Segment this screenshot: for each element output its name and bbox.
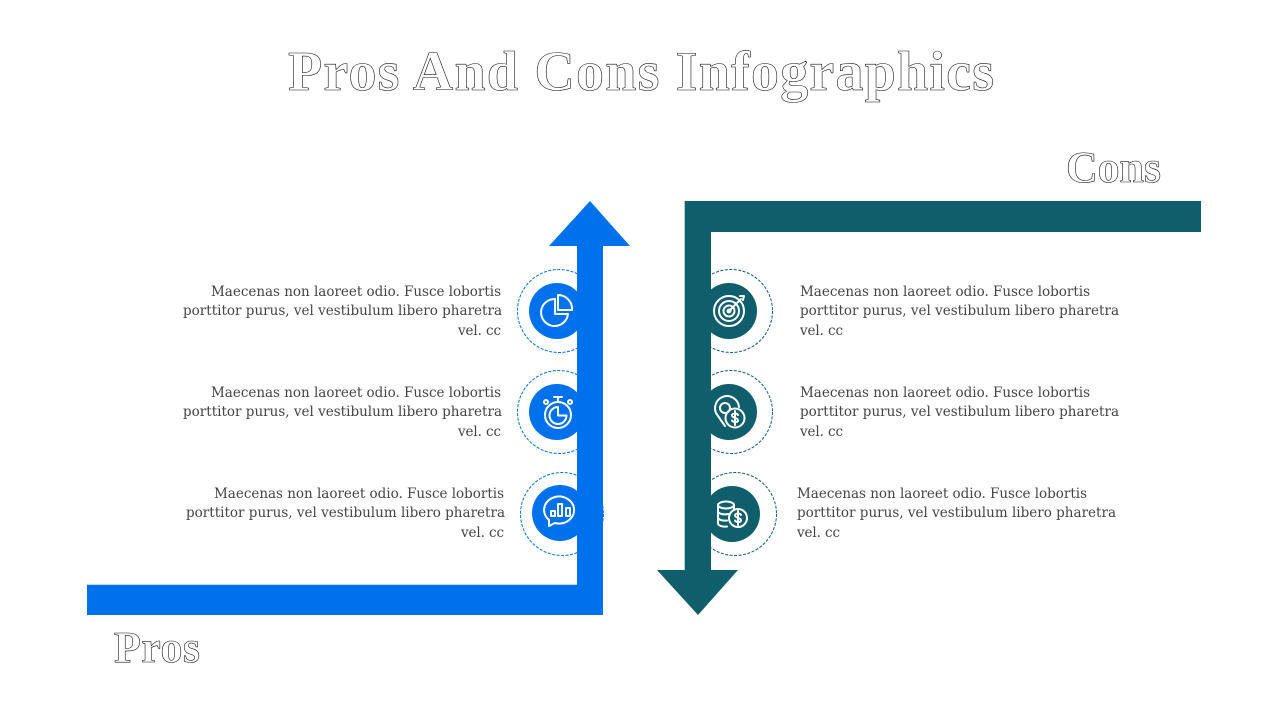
text block: porttitor purus, vel vestibulum libero pharetra [797,505,1116,521]
arrow: pros up arrow [87,201,630,615]
icon: chat with bars [544,497,574,526]
text block: Maecenas non laoreet odio. Fusce lobortis [211,385,501,401]
badge [701,283,757,339]
cons item 1 [690,270,1119,352]
panel: cons [657,201,1201,615]
dashed ring [690,270,772,352]
text block: vel. cc [457,424,501,440]
text block: porttitor purus, vel vestibulum libero pharetra [800,303,1119,319]
dashed ring [690,370,772,454]
icon: stopwatch [544,397,572,428]
icon: target [714,296,744,326]
dashed ring [694,472,776,556]
icon: coins with dollar [718,502,747,527]
badge [529,384,585,440]
dashed ring [518,370,600,454]
text block: vel. cc [799,323,843,339]
title: Pros And Cons Infographics [288,41,994,103]
pros item 1 [183,270,600,352]
heading: Cons: Cons [1066,143,1161,192]
text block: porttitor purus, vel vestibulum libero pharetra [800,404,1119,420]
text block: vel. cc [457,323,501,339]
icon: pie chart [541,295,572,326]
text block: vel. cc [799,424,843,440]
badge [704,486,760,542]
badge [701,384,757,440]
arrow: cons down arrow [657,201,1201,615]
badge [532,485,588,541]
text block: Maecenas non laoreet odio. Fusce lobortis [800,385,1090,401]
text block: porttitor purus, vel vestibulum libero pharetra [183,303,502,319]
text block: porttitor purus, vel vestibulum libero pharetra [183,404,502,420]
panel: pros [87,201,630,615]
text block: Maecenas non laoreet odio. Fusce lobortis [797,486,1087,502]
dashed ring [520,472,604,556]
badge [529,283,585,339]
text block: porttitor purus, vel vestibulum libero pharetra [186,505,505,521]
text block: Maecenas non laoreet odio. Fusce lobortis [211,284,501,300]
text block: vel. cc [796,525,840,541]
dashed ring [518,270,600,352]
cons item 3 [694,472,1116,556]
text block: Maecenas non laoreet odio. Fusce lobortis [800,284,1090,300]
heading: Pros: Pros [114,623,200,672]
pros item 2 [183,370,600,454]
icon: location pin with dollar [715,396,744,428]
text block: Maecenas non laoreet odio. Fusce lobortis [214,486,504,502]
pros item 3 [186,472,604,556]
text block: vel. cc [460,525,504,541]
cons item 2 [690,370,1119,454]
